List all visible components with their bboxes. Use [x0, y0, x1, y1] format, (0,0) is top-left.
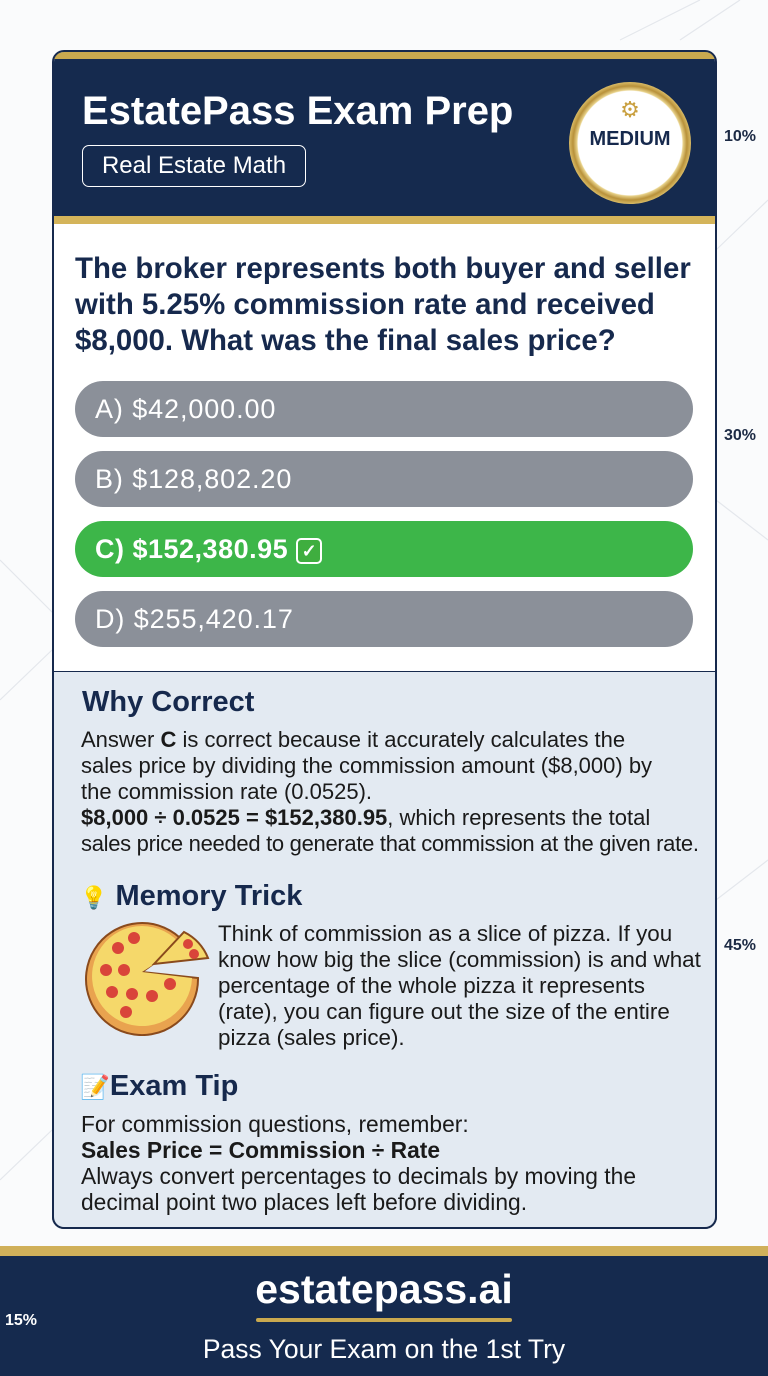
footer [0, 1246, 768, 1376]
icon: gear: ⚙ [620, 97, 640, 122]
option A: A) $42,000.00 [95, 394, 276, 424]
option D: D) $255,420.17 [95, 604, 294, 634]
option B [75, 451, 693, 507]
subtitle badge: Real Estate Math [102, 152, 286, 179]
why correct text: sales price needed to generate that commission at the given rate. [81, 831, 699, 856]
question: The broker represents both buyer and seller [75, 252, 691, 285]
brand: estatepass.ai [255, 1266, 513, 1312]
heading: memory trick: 💡 Memory Trick [80, 880, 302, 912]
exam tip text: For commission questions, remember: [81, 1111, 469, 1137]
memory trick text [218, 921, 701, 1050]
question [74, 252, 691, 357]
why correct text: sales price by dividing the commission amount ($8,000) by [81, 753, 652, 778]
side label 45%: 45% [724, 937, 756, 954]
option D [75, 591, 693, 647]
memory trick text: (rate), you can figure out the size of the entire [218, 999, 670, 1024]
option B: B) $128,802.20 [95, 464, 292, 494]
heading: why correct: Why Correct [82, 686, 254, 718]
memory trick text: Think of commission as a slice of pizza. If you [218, 921, 672, 946]
brand underline [256, 1318, 512, 1322]
subtitle badge [82, 145, 306, 187]
side label 10%: 10% [724, 128, 756, 145]
why correct text: the commission rate (0.0525). [81, 779, 372, 804]
difficulty badge: MEDIUM [589, 128, 671, 150]
memory trick text: know how big the slice (commission) is and what [218, 947, 701, 972]
option C correct: C) $152,380.95 [95, 534, 288, 564]
exam tip text: Always convert percentages to decimals by moving the [81, 1163, 636, 1189]
option A [75, 381, 693, 437]
title: EstatePass Exam Prep [82, 89, 513, 133]
exam tip text: decimal point two places left before dividing. [81, 1189, 527, 1215]
why correct text: Answer C is correct because it accurately calculates the [81, 727, 625, 752]
exam tip text [81, 1111, 636, 1215]
exam tip text: Sales Price = Commission ÷ Rate [81, 1137, 440, 1163]
option C correct [75, 521, 693, 577]
question: with 5.25% commission rate and received [75, 288, 655, 321]
side label 15%: 15% [5, 1312, 37, 1329]
icon: pizza [85, 922, 210, 1036]
option C correct: ✓ [302, 541, 317, 561]
tagline: Pass Your Exam on the 1st Try [203, 1334, 565, 1364]
question: $8,000. What was the final sales price? [75, 324, 616, 357]
memory trick text: percentage of the whole pizza it represents [218, 973, 645, 998]
why correct text: $8,000 ÷ 0.0525 = $152,380.95, which represents the total [81, 805, 650, 830]
card [52, 50, 717, 1229]
difficulty badge [569, 82, 691, 204]
memory trick text: pizza (sales price). [218, 1025, 405, 1050]
explanation panel [52, 671, 717, 1229]
why correct text [81, 727, 699, 856]
header [54, 52, 719, 224]
heading: exam tip: 📝Exam Tip [80, 1070, 238, 1102]
side label 30%: 30% [724, 427, 756, 444]
